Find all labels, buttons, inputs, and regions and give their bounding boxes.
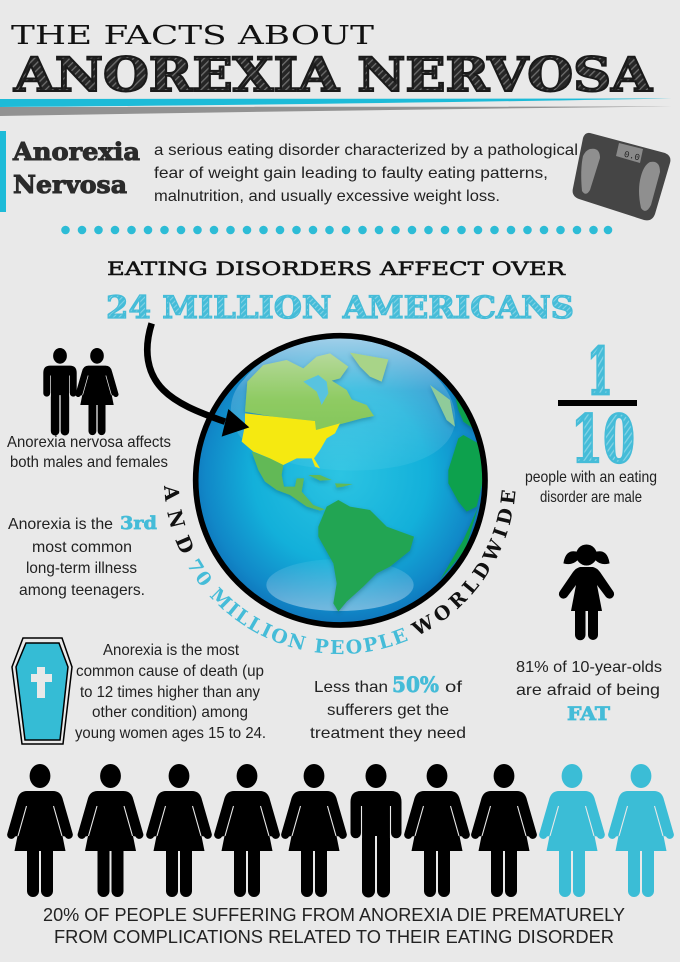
- heading: 24 million americans: 24 MILLION AMERICANS: [106, 290, 574, 326]
- text: affects males and females: Anorexia nervosa affects: [7, 434, 171, 451]
- text: treatment statistic: Less than: [314, 679, 388, 696]
- land: greenland: [350, 353, 388, 382]
- definition panel: [0, 131, 578, 212]
- lower highlight: [266, 559, 414, 611]
- text: cause of death: to 12 times higher than any: [80, 684, 260, 701]
- text: cause of death: Anorexia is the most: [103, 642, 240, 659]
- text: one in ten are male: people with an eating: [525, 469, 657, 486]
- icon: girl: [559, 544, 614, 640]
- icon: bathroom scale: 0.0: [623, 150, 641, 163]
- icon: bathroom scale: [573, 133, 670, 220]
- definition term: [12, 137, 140, 199]
- text: afraid of being fat: [516, 659, 662, 725]
- fraction: 1 in 10: [558, 334, 637, 478]
- hudson bay: [303, 375, 328, 405]
- text: treatment statistic: treatment they need: [310, 725, 466, 742]
- footer statement: FROM COMPLICATIONS RELATED TO THEIR EATING DISORDER: [54, 926, 614, 947]
- definition term: Nervosa: [13, 170, 127, 199]
- text: cause of death: young women ages 15 to 24.: [75, 725, 266, 742]
- text: afraid of being fat: are afraid of being: [516, 682, 660, 699]
- globe: [147, 323, 485, 625]
- landmasses: [245, 353, 484, 612]
- pictogram row: 8 black, 2 cyan: [7, 764, 674, 898]
- land: mexico and central america: [252, 452, 325, 511]
- footer statement: [43, 904, 625, 947]
- icon: man and woman: [43, 348, 119, 435]
- fraction: 1 in 10: 10: [571, 402, 635, 478]
- cross: [31, 667, 52, 698]
- text: treatment statistic: 50%: [392, 672, 439, 697]
- text: cause of death: other condition) among: [92, 704, 248, 721]
- text: afraid of being fat: 81% of 10-year-olds: [516, 659, 662, 676]
- arrow: [147, 323, 249, 437]
- text: cause of death: common cause of death (up: [76, 663, 264, 680]
- text: one in ten are male: [525, 469, 657, 506]
- text: affects males and females: both males and females: [10, 454, 168, 471]
- fraction: 1 in 10: 1: [587, 334, 613, 410]
- definition text: malnutrition, and usually excessive weight loss.: [154, 188, 500, 205]
- text: cause of death: [75, 642, 266, 742]
- ocean: [196, 336, 484, 624]
- heading: eating disorders affect over: EATING DISORDERS AFFECT OVER: [107, 258, 566, 280]
- gloss highlight: [231, 338, 455, 470]
- curved caption around globe: 70 MILLION PEOPLE: [188, 558, 408, 654]
- definition text: [154, 142, 578, 205]
- land: canada: [245, 353, 374, 430]
- text: afraid of being fat: FAT: [567, 703, 610, 725]
- text: third most common illness: long-term illness: [26, 560, 137, 577]
- curved caption around globe: AND: [164, 486, 192, 552]
- globe outline: [196, 336, 485, 625]
- curved caption around globe: [164, 486, 516, 654]
- text: treatment statistic: sufferers get the: [327, 702, 449, 719]
- text: third most common illness: among teenagers.: [19, 582, 145, 599]
- text: one in ten are male: disorder are male: [540, 489, 642, 506]
- header rule: [0, 98, 672, 116]
- text: treatment statistic: [310, 672, 466, 742]
- land: south america: [318, 500, 414, 612]
- text: third most common illness: [8, 513, 157, 599]
- icon: coffin: [12, 638, 72, 744]
- text: affects males and females: [7, 434, 171, 471]
- curved caption around globe: WORLDWIDE: [410, 490, 516, 634]
- text: third most common illness: 3rd: [120, 513, 157, 534]
- dotted divider: [61, 226, 612, 234]
- land: africa and europe: [448, 435, 484, 512]
- land: caribbean: [308, 475, 353, 488]
- footer statement: 20% OF PEOPLE SUFFERING FROM ANOREXIA DIE PREMATURELY: [43, 904, 625, 925]
- title: [11, 21, 653, 103]
- text: treatment statistic: of: [445, 679, 463, 696]
- text: third most common illness: Anorexia is the: [8, 516, 113, 533]
- definition term: Anorexia: [12, 137, 140, 166]
- text: third most common illness: most common: [32, 539, 132, 556]
- definition text: fear of weight gain leading to faulty eating patterns,: [154, 165, 548, 182]
- title line: the facts about: THE FACTS ABOUT: [11, 21, 375, 51]
- title line: anorexia nervosa: ANOREXIA NERVOSA: [13, 48, 653, 103]
- definition text: a serious eating disorder characterized by a pathological: [154, 142, 578, 159]
- land: usa: [242, 413, 340, 468]
- accent bar: [0, 131, 6, 212]
